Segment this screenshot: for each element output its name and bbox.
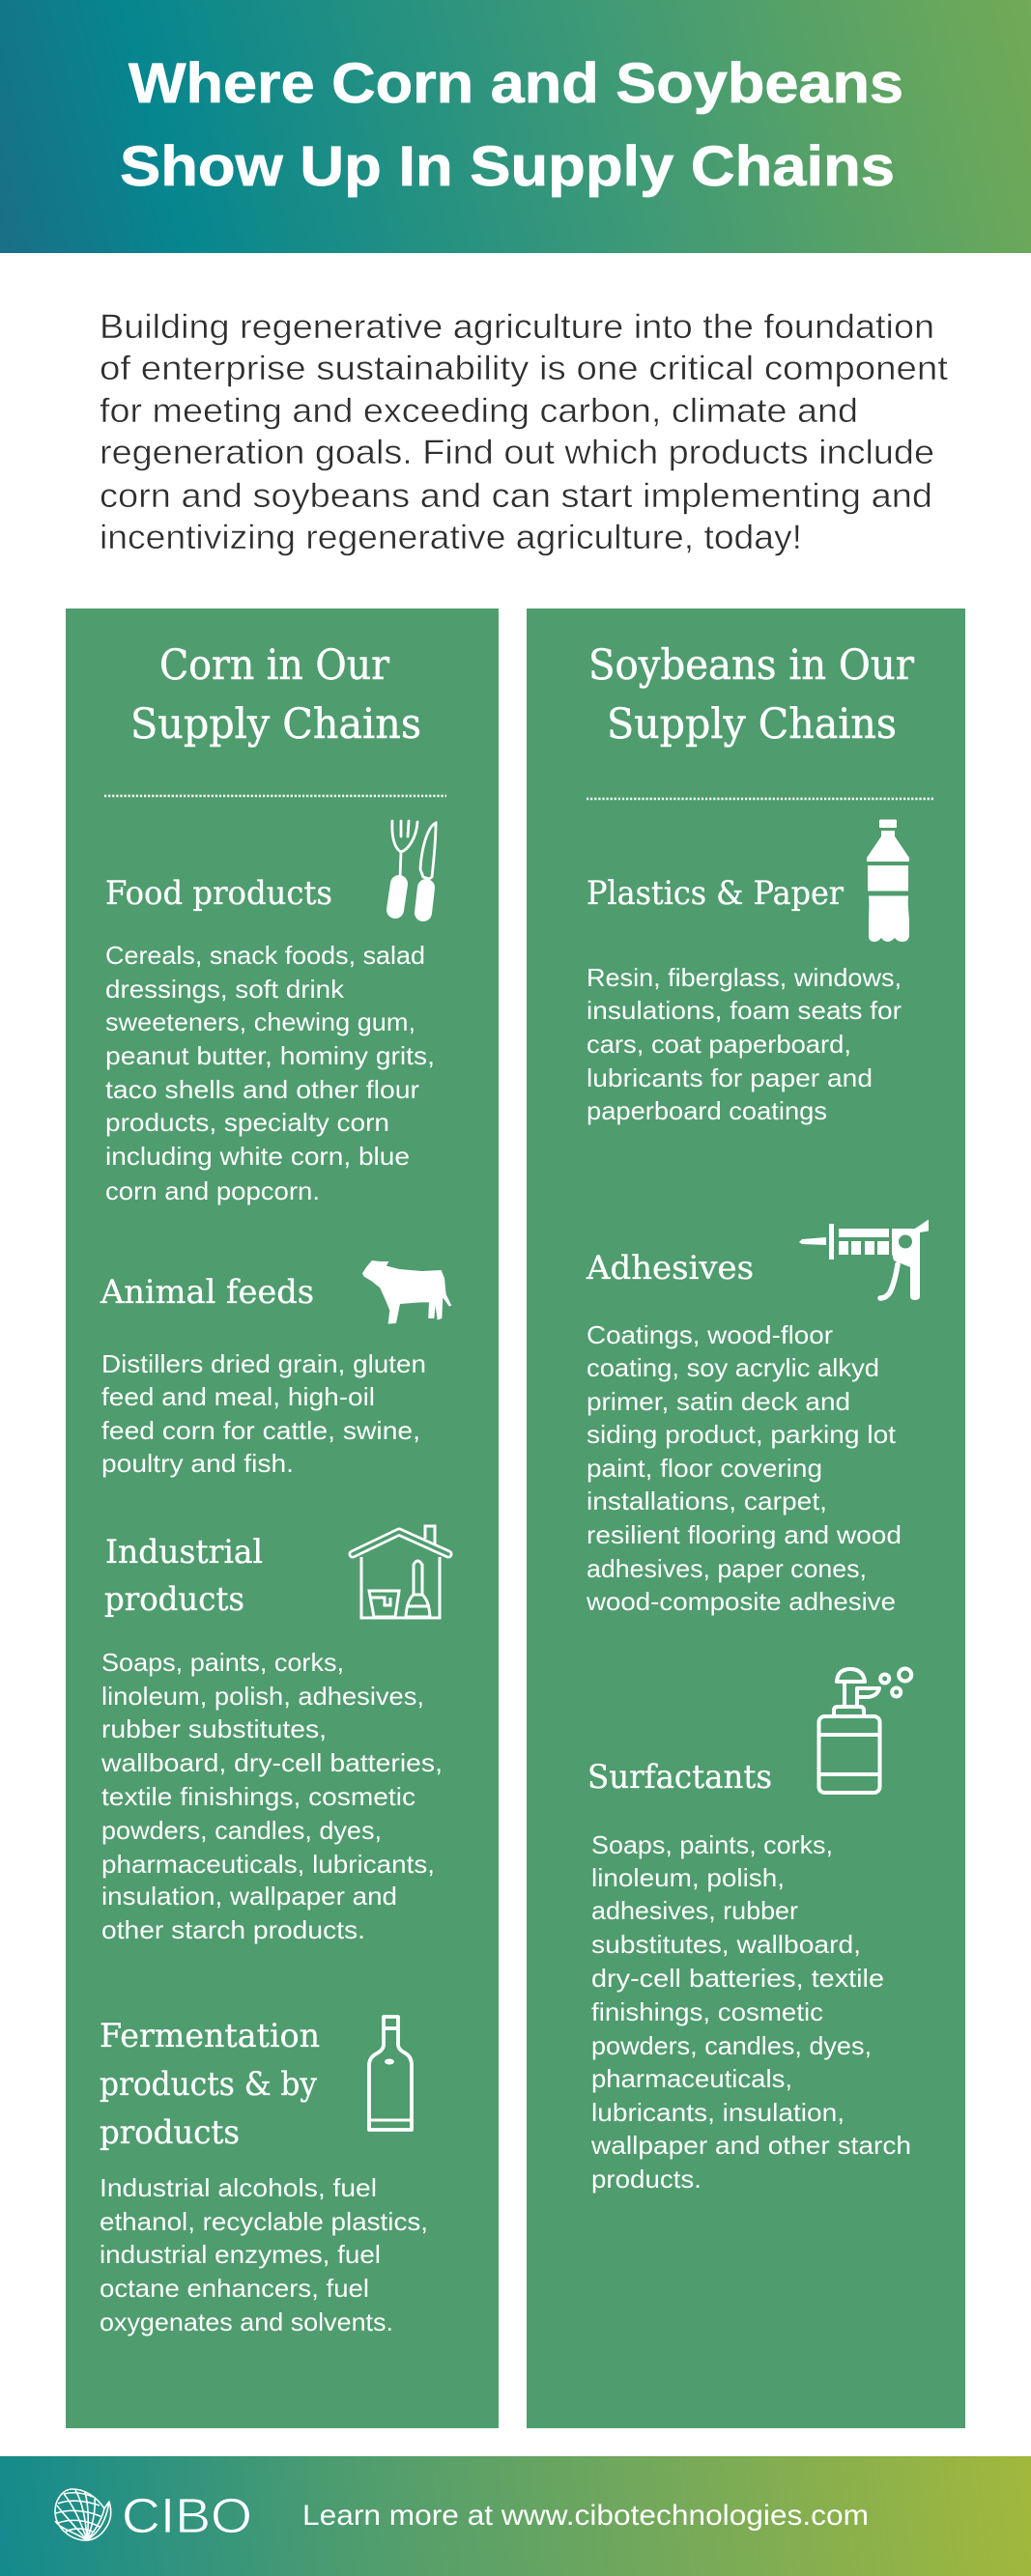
text: surfactants: powders, candles, dyes,	[591, 2031, 872, 2060]
text: food products	[105, 941, 435, 1205]
text: industrial products: pharmaceuticals, lubricants,	[101, 1850, 435, 1879]
text: food products: dressings, soft drink	[105, 975, 345, 1004]
intro paragraph: regeneration goals. Find out which products include	[100, 434, 934, 471]
header banner with title	[0, 0, 1031, 253]
footer link text: Learn more at www.cibotechnologies.com	[302, 2500, 869, 2532]
text: adhesives: coating, soy acrylic alkyd	[587, 1353, 879, 1382]
icon: bottle outline	[369, 2017, 412, 2130]
text: food products: Cereals, snack foods, salad	[105, 941, 425, 970]
text: industrial products: wallboard, dry-cell batteries,	[100, 1748, 443, 1777]
section heading: fermentation products	[100, 2017, 320, 2152]
icon: CIBO globe leaf logo	[55, 2489, 111, 2540]
section heading: industrial products: Industrial	[105, 1533, 263, 1571]
section heading: fermentation products: Fermentation	[100, 2017, 320, 2055]
text: plastics and paper: insulations, foam seats for	[587, 996, 902, 1025]
text: industrial products: powders, candles, dyes,	[101, 1816, 382, 1845]
panel: corn in our supply chains	[66, 609, 499, 2428]
text: plastics and paper: Resin, fiberglass, windows,	[587, 963, 902, 992]
icon: soap dispenser	[819, 1669, 911, 1793]
text: plastics and paper: paperboard coatings	[587, 1096, 827, 1125]
text: fermentation products: ethanol, recyclable plastics,	[100, 2207, 428, 2236]
icon: cow	[362, 1260, 451, 1324]
panel heading: corn	[130, 641, 421, 749]
title	[120, 52, 903, 198]
text: industrial products: insulation, wallpaper and	[101, 1882, 397, 1911]
text: surfactants: Soaps, paints, corks,	[591, 1830, 833, 1859]
text: animal feeds: poultry and fish.	[101, 1449, 294, 1478]
text: food products: taco shells and other flour	[105, 1075, 419, 1104]
panel heading: corn: Supply Chains	[130, 700, 421, 749]
text: industrial products: textile finishings, cosmetic	[101, 1782, 415, 1811]
text: fermentation products: octane enhancers, fuel	[100, 2274, 369, 2303]
text: surfactants: wallpaper and other starch	[590, 2131, 911, 2160]
intro paragraph: for meeting and exceeding carbon, climate and	[100, 392, 858, 430]
section heading: adhesives: Adhesives	[586, 1249, 754, 1288]
text: surfactants: adhesives, rubber	[591, 1896, 798, 1925]
text: animal feeds: feed corn for cattle, swine,	[101, 1416, 420, 1445]
text: adhesives: primer, satin deck and	[587, 1387, 850, 1416]
section heading: plastics and paper: Plastics & Paper	[587, 874, 845, 913]
text: plastics and paper: lubricants for paper and	[587, 1063, 873, 1092]
text: food products: corn and popcorn.	[105, 1176, 320, 1205]
text: adhesives: resilient flooring and wood	[587, 1520, 902, 1549]
icon: plastic bottle	[867, 819, 909, 942]
text: food products: peanut butter, hominy grits,	[105, 1041, 435, 1070]
text: industrial products: Soaps, paints, corks,	[101, 1648, 344, 1677]
panel heading: soybeans: Soybeans in Our	[588, 641, 914, 690]
intro paragraph: of enterprise sustainability is one critical component	[100, 350, 948, 387]
text: fermentation products: oxygenates and solvents.	[100, 2307, 393, 2336]
text: industrial products: linoleum, polish, adhesives,	[101, 1682, 424, 1711]
text: surfactants: linoleum, polish,	[591, 1863, 785, 1892]
logo wordmark: CIBO	[122, 2488, 252, 2543]
text: animal feeds	[101, 1349, 426, 1478]
text: adhesives	[586, 1320, 902, 1616]
icon: house with paint bucket and brush	[353, 1526, 448, 1618]
text: fermentation products	[100, 2173, 428, 2336]
text: surfactants: lubricants, insulation,	[591, 2098, 845, 2127]
icon: caulk gun	[799, 1219, 929, 1300]
text: food products: products, specialty corn	[105, 1108, 389, 1137]
text: surfactants: products.	[591, 2165, 702, 2194]
section heading: surfactants: Surfactants	[587, 1758, 772, 1797]
text: food products: including white corn, blue	[105, 1142, 410, 1171]
section heading: animal feeds: Animal feeds	[100, 1273, 314, 1312]
text: adhesives: paint, floor covering	[587, 1454, 822, 1483]
section heading: industrial products: products	[104, 1580, 244, 1619]
panel heading: soybeans	[588, 641, 914, 749]
section heading: industrial products	[104, 1533, 263, 1619]
text: surfactants: dry-cell batteries, textile	[591, 1964, 884, 1993]
text: fermentation products: Industrial alcohols, fuel	[100, 2173, 377, 2202]
intro paragraph	[100, 308, 948, 556]
text: surfactants: pharmaceuticals,	[591, 2064, 792, 2093]
section heading: food products: Food products	[105, 874, 332, 913]
text: adhesives: installations, carpet,	[587, 1486, 827, 1515]
text: plastics and paper	[587, 963, 902, 1125]
intro paragraph: incentivizing regenerative agriculture, today!	[100, 519, 802, 556]
section heading: fermentation products: products & by	[100, 2065, 318, 2104]
icon: fork and knife	[392, 821, 436, 913]
text: animal feeds: Distillers dried grain, gluten	[101, 1349, 426, 1378]
intro paragraph: Building regenerative agriculture into the foundation	[100, 308, 934, 346]
title: Where Corn and Soybeans	[129, 52, 903, 115]
text: adhesives: siding product, parking lot	[587, 1420, 897, 1449]
text: surfactants: substitutes, wallboard,	[591, 1930, 861, 1959]
text: food products: sweeteners, chewing gum,	[105, 1007, 415, 1036]
panel heading: corn: Corn in Our	[159, 641, 389, 690]
text: animal feeds: feed and meal, high-oil	[101, 1382, 375, 1411]
panel heading: soybeans: Supply Chains	[607, 700, 897, 749]
text: plastics and paper: cars, coat paperboard,	[587, 1030, 851, 1059]
section heading: fermentation products: products	[100, 2113, 240, 2152]
text: surfactants: finishings, cosmetic	[591, 1997, 823, 2026]
text: adhesives: adhesives, paper cones,	[587, 1554, 867, 1583]
intro paragraph: corn and soybeans and can start implementing and	[100, 477, 932, 515]
text: fermentation products: industrial enzymes, fuel	[100, 2240, 381, 2269]
text: adhesives: Coatings, wood-floor	[587, 1320, 833, 1349]
title: Show Up In Supply Chains	[120, 135, 895, 198]
panel: soybeans in our supply chains	[527, 609, 965, 2428]
text: industrial products: other starch products.	[101, 1915, 365, 1944]
text: industrial products	[100, 1648, 443, 1944]
text: surfactants	[590, 1830, 911, 2194]
text: industrial products: rubber substitutes,	[101, 1714, 327, 1743]
footer banner	[0, 2456, 1031, 2576]
text: adhesives: wood-composite adhesive	[586, 1587, 896, 1616]
